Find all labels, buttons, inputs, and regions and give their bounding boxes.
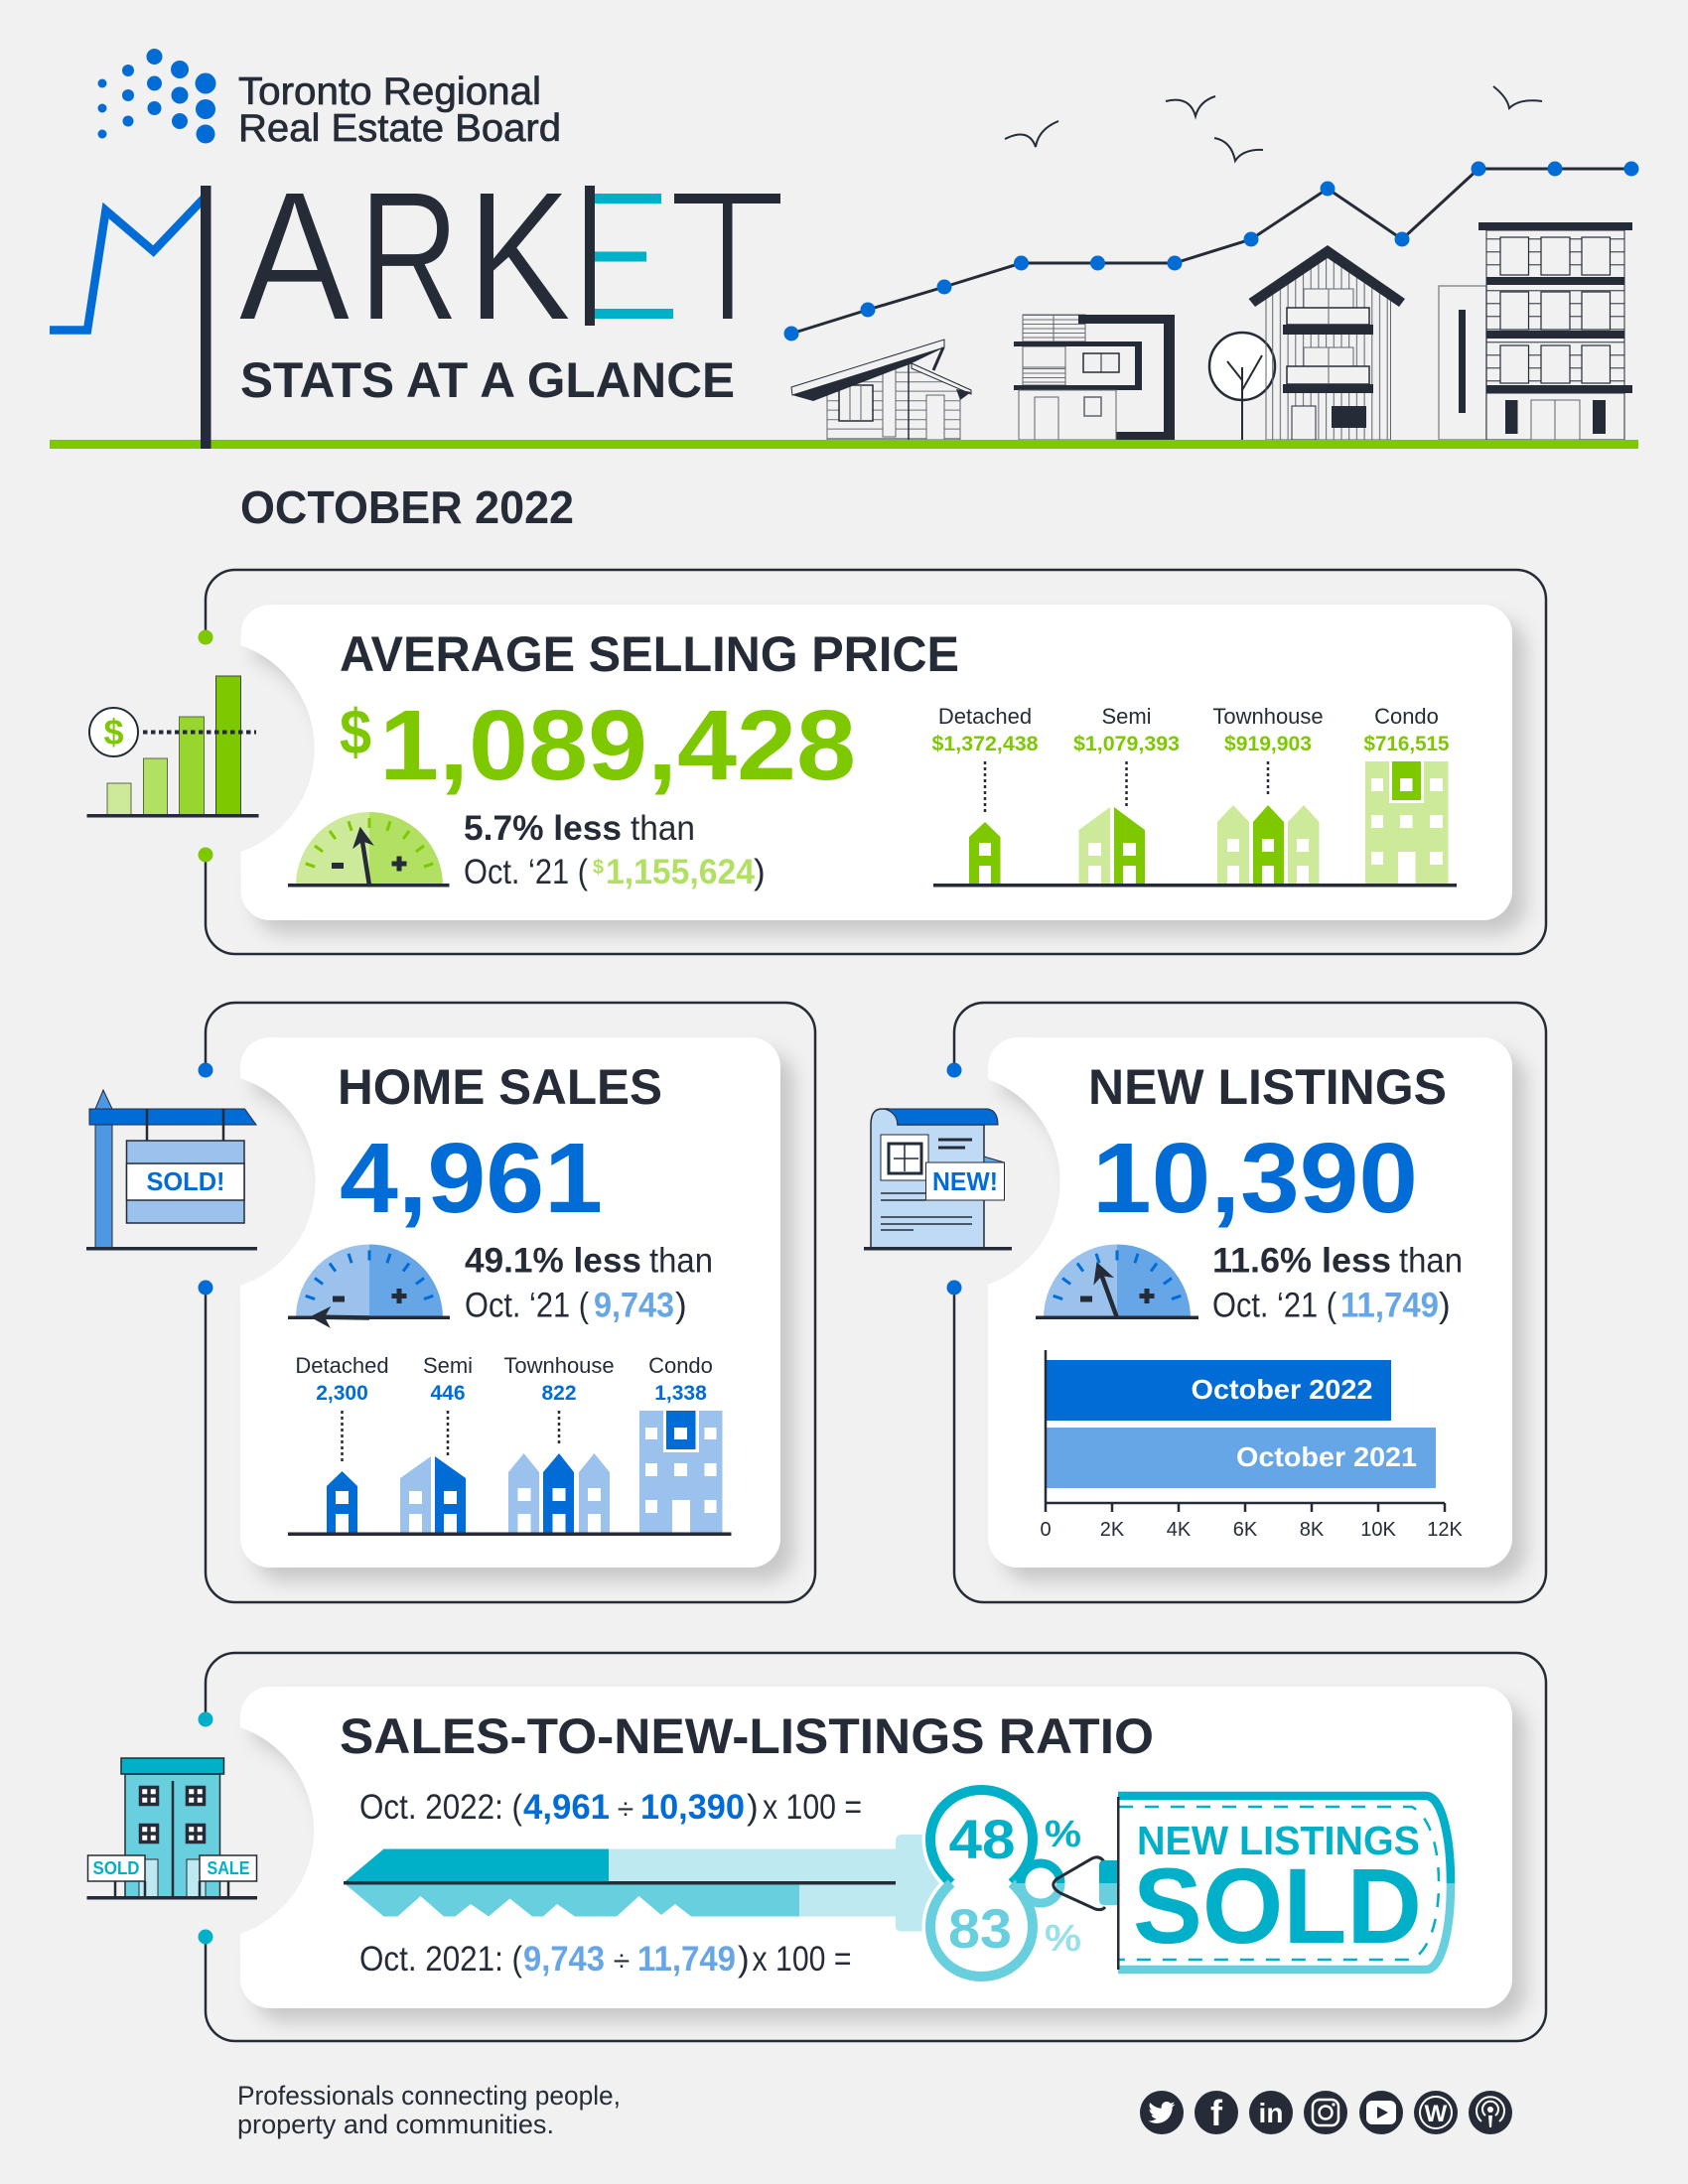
comparison text: ) [675,1287,687,1324]
category counts: Detached [295,1353,389,1378]
card [988,1037,1512,1568]
letters ARK: R [358,154,460,359]
title: MARKET [50,154,780,449]
formula 2021: ÷ [614,1945,630,1978]
bar chart: October 2022 [1192,1374,1372,1405]
category prices: Condo [1374,704,1439,729]
key head ring: 48% and 83%: 83 [948,1897,1012,1960]
tag: new listings sold [1099,1796,1451,1970]
comparison text: than [1399,1241,1463,1281]
category counts: 446 [430,1382,466,1405]
gauge [288,1245,450,1328]
bar chart: 6K [1233,1519,1258,1541]
icon: price bars [87,676,258,818]
category houses [288,1411,731,1536]
category counts [295,1353,713,1405]
formula 2021: 11,749 [637,1940,736,1979]
comparison text: Oct. ‘21 ( [465,1287,589,1324]
formula 2022: Oct. 2022: ( [359,1788,522,1827]
formula 2021: ) [738,1940,750,1979]
panel outline [206,1003,815,1602]
icon: price bars: $ [103,712,124,752]
formula 2022: 4,961 [523,1788,610,1827]
key head ring: 48% and 83%: % [1045,1814,1081,1855]
logo [97,49,561,150]
bar chart: 8K [1300,1519,1325,1541]
icon: condo building: SALE [207,1858,250,1878]
comparison text: 11,749 [1340,1287,1439,1324]
letter T [674,194,780,319]
bar chart: 12K [1427,1519,1463,1541]
heading: SALES-TO-NEW-LISTINGS RATIO [340,1708,1154,1764]
formula 2022 [359,1788,862,1827]
comparison text: 49.1% less [465,1241,641,1281]
house 2 [1014,315,1175,440]
comparison text: ) [754,853,766,891]
connector dots [199,629,212,862]
letters ARK [238,154,572,359]
headline value: 10,390 [1092,1123,1418,1234]
category counts: 2,300 [316,1382,368,1405]
footer tagline: Professionals connecting people, [237,2081,621,2111]
panel: average selling price [87,570,1546,954]
green ground line [50,440,1638,449]
icon: linkedin [1249,2091,1293,2134]
comparison text [464,809,766,891]
subtitle: STATS AT A GLANCE [240,352,735,408]
gauge [1036,1245,1198,1321]
category prices: $1,372,438 [931,733,1039,755]
birds [1005,86,1542,161]
key head ring: 48% and 83%: % [1045,1918,1081,1960]
bar chart [1040,1350,1463,1541]
formula 2021 [359,1940,852,1979]
key head ring: 48% and 83%: 48 [949,1808,1015,1870]
formula 2022: x 100 = [763,1788,862,1827]
category prices [931,704,1450,755]
icon: podcast [1469,2091,1512,2134]
category prices: Detached [938,704,1032,729]
icon: sold sign: SOLD! [147,1166,224,1196]
bar chart: 0 [1040,1519,1052,1541]
comparison text: Oct. ‘21 ( [464,853,588,891]
comparison text: $ [593,857,604,879]
icon: linkedin: in [1259,2098,1283,2128]
bar chart: October 2021 [1236,1441,1417,1472]
card [240,605,1512,920]
formula 2021: Oct. 2021: ( [359,1940,522,1979]
comparison text [465,1241,713,1324]
comparison text: ) [1439,1287,1451,1324]
comparison text: 1,155,624 [606,853,756,891]
house 3 [1249,245,1405,440]
category prices: $1,079,393 [1073,733,1180,755]
icon: twitter [1140,2091,1184,2134]
formula 2021: x 100 = [753,1940,852,1979]
formula 2022: ÷ [618,1793,633,1826]
letter M post [201,186,211,449]
heading: HOME SALES [338,1059,662,1115]
comparison text [1212,1241,1463,1324]
panel outline [954,1003,1546,1602]
category houses [933,761,1457,887]
category counts: 822 [541,1382,577,1405]
letter M line [50,198,205,330]
rising line chart [784,161,1638,341]
headline value: 4,961 [340,1123,603,1234]
comparison text: 5.7% less [464,809,622,848]
social icons [1140,2091,1512,2134]
icon: facebook [1195,2091,1238,2134]
footer tagline: property and communities. [237,2110,554,2139]
tree [1209,333,1275,440]
icon: sold sign [86,1090,257,1251]
letters ARK: K [467,154,572,359]
tag: new listings sold: NEW LISTINGS [1137,1818,1420,1863]
tag: new listings sold: SOLD [1133,1845,1422,1966]
category prices: Semi [1101,704,1152,729]
category prices: $919,903 [1224,733,1312,755]
panel: new listings [864,1003,1546,1602]
comparison text: 9,743 [594,1287,674,1324]
connector dots [199,1711,212,1944]
key head ring: 48% and 83% [930,1790,1081,1977]
house 1 [791,340,971,440]
formula 2022: 10,390 [640,1788,745,1827]
card [240,1687,1512,2008]
logo text [238,70,561,150]
bar chart: 4K [1167,1519,1192,1541]
comparison text: than [631,809,695,848]
icon: condo building [87,1758,257,1900]
icon: listing document: NEW! [932,1166,998,1196]
icon: condo building: SOLD [93,1858,139,1878]
category prices: $716,515 [1364,733,1450,755]
tag string [1054,1857,1105,1910]
panel outline [206,1653,1546,2041]
heading: NEW LISTINGS [1088,1059,1447,1115]
category counts: Semi [423,1353,473,1378]
bar chart: 10K [1360,1519,1396,1541]
panel outline [206,570,1546,954]
key [344,1835,958,1932]
letter E [585,186,673,326]
category counts: Condo [648,1353,713,1378]
icon: facebook: f [1210,2093,1223,2133]
comparison text: Oct. ‘21 ( [1212,1287,1336,1324]
comparison text: than [649,1241,713,1281]
bar chart: 2K [1100,1519,1125,1541]
footer tagline [237,2081,621,2139]
category counts: Townhouse [503,1353,615,1378]
letters ARK: A [238,154,351,359]
headline value: 1,089,428 [379,690,856,801]
panel: sales-to-new-listings ratio [87,1653,1546,2041]
formula 2021: 9,743 [523,1940,605,1979]
icon: youtube [1359,2091,1403,2134]
panel: home sales [86,1003,815,1602]
icon: listing document [864,1109,1012,1251]
icon: wordpress: W [1425,2101,1448,2127]
comparison text: 11.6% less [1212,1241,1391,1281]
connector dots [947,1062,961,1295]
connector dots [199,1062,212,1295]
apartment building [1439,222,1632,440]
gauge [288,812,449,887]
formula 2022: ) [747,1788,759,1827]
headline value: $ [340,696,371,767]
logo text: Real Estate Board [238,107,561,150]
logo dots [97,49,216,143]
heading: AVERAGE SELLING PRICE [340,626,959,682]
icon: instagram [1304,2091,1347,2134]
card [240,1037,780,1568]
icon: wordpress [1414,2091,1458,2134]
logo text: Toronto Regional [238,70,541,113]
category prices: Townhouse [1212,704,1324,729]
date heading: OCTOBER 2022 [240,481,574,533]
category counts: 1,338 [654,1382,707,1405]
